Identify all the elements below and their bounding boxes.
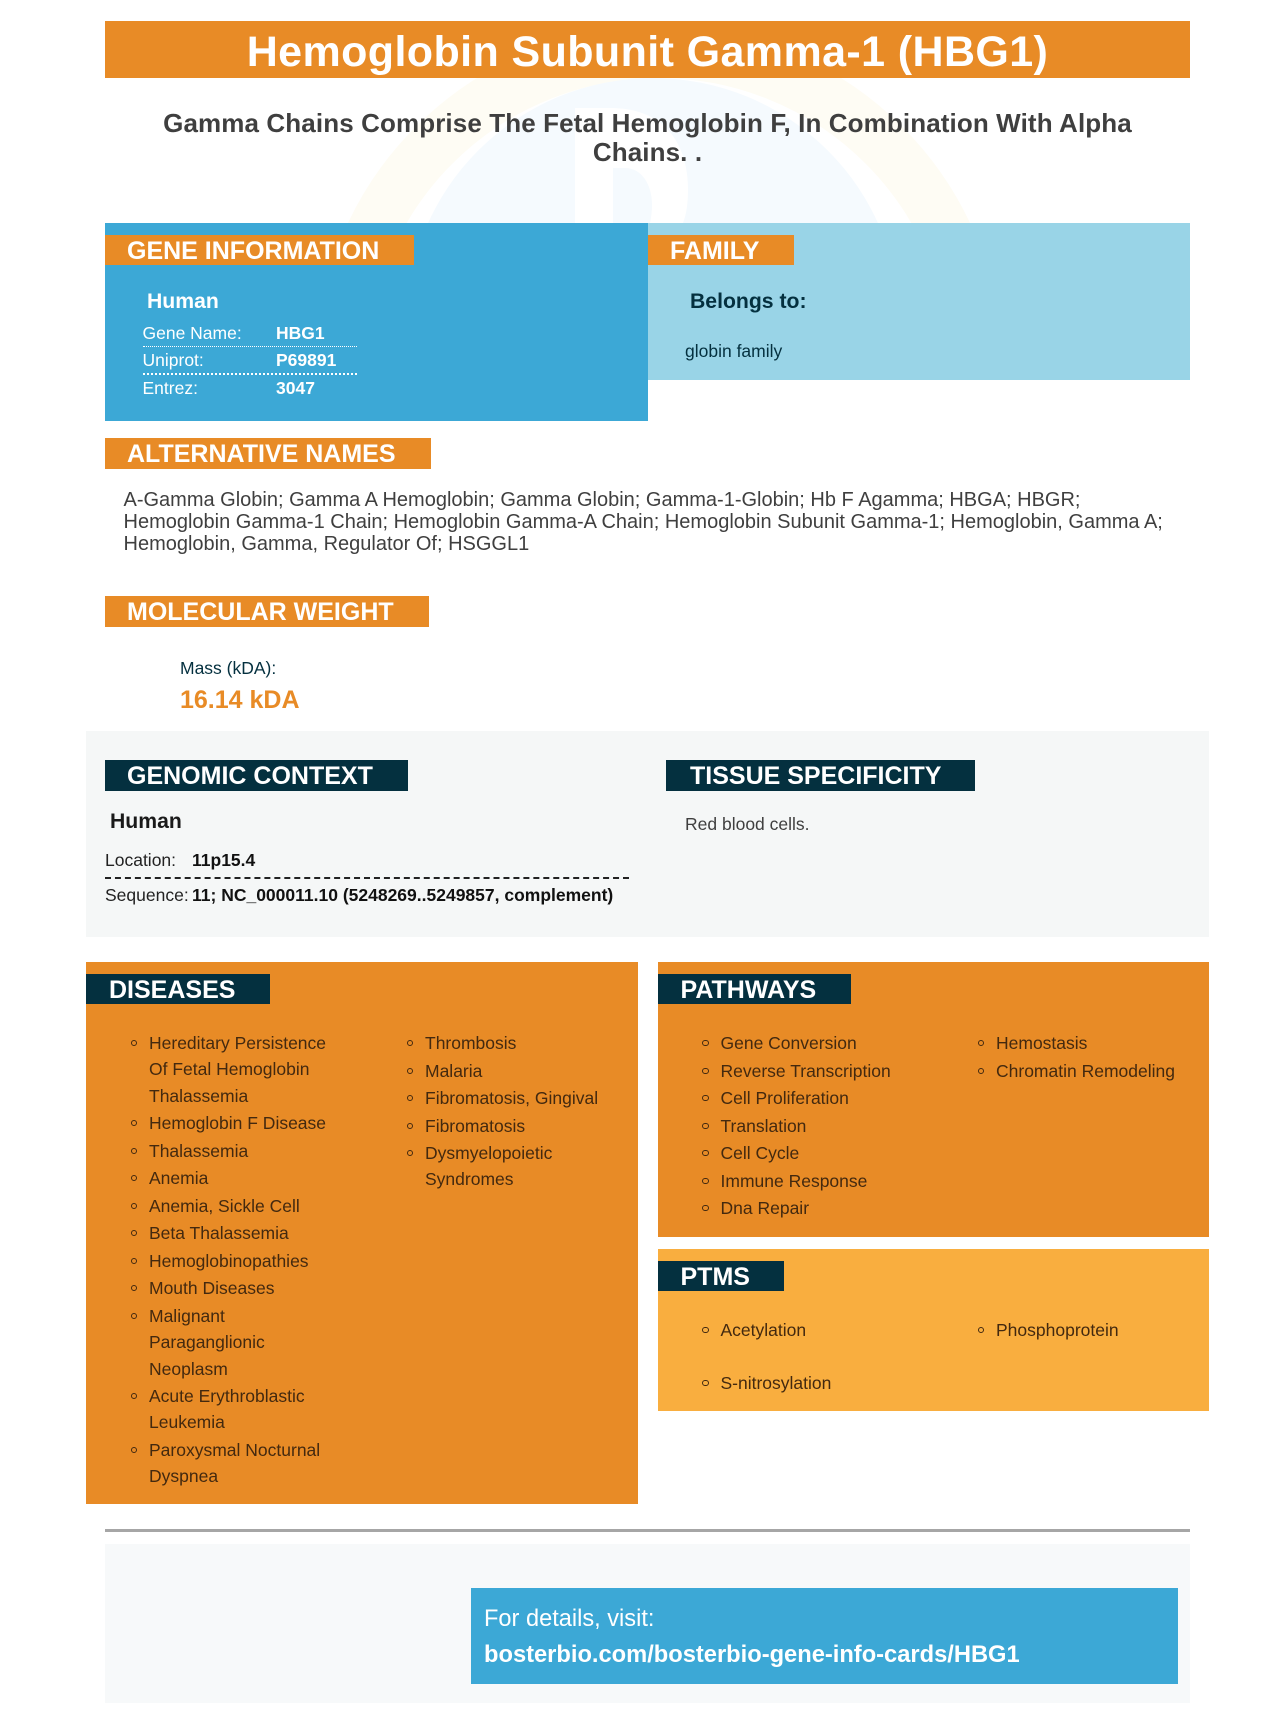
disease list: Leukemia: [149, 1412, 225, 1432]
disease list: Thalassemia: [149, 1141, 248, 1161]
disease list: Mouth Diseases: [149, 1278, 274, 1298]
mass label: Mass (kDA):: [180, 658, 276, 678]
sequence row: Sequence:: [105, 885, 189, 905]
pathway list: Cell Proliferation: [720, 1088, 849, 1108]
disease list: Beta Thalassemia: [149, 1223, 289, 1243]
panel: family: [648, 223, 1190, 380]
gene identifiers table: Entrez:: [142, 378, 198, 398]
heading: alternative names: ALTERNATIVE NAMES: [127, 440, 396, 468]
heading: genomic context: GENOMIC CONTEXT: [127, 762, 373, 790]
pathway list: Immune Response: [720, 1171, 867, 1191]
belongs to label: Belongs to:: [690, 290, 807, 313]
disease list: Dysmyelopoietic: [425, 1143, 552, 1163]
subtitle: [163, 108, 1132, 167]
disease list: Of Fetal Hemoglobin: [149, 1059, 310, 1079]
pathway list: [702, 1033, 1175, 1218]
species label: Human: [147, 290, 219, 313]
ptm list: Acetylation: [720, 1320, 806, 1340]
heading: molecular weight: MOLECULAR WEIGHT: [127, 598, 394, 626]
heading: ptms: PTMS: [680, 1263, 750, 1291]
callout: details link: bosterbio.com/bosterbio-gene-info-cards/HBG1: [484, 1642, 1020, 1668]
disease list: Anemia: [149, 1168, 208, 1188]
disease list: Malaria: [425, 1061, 482, 1081]
location row: [105, 850, 256, 870]
background watermark logo: [348, 78, 970, 223]
pathway list: Cell Cycle: [720, 1143, 799, 1163]
disease list: [131, 1033, 598, 1486]
disease list: Hemoglobinopathies: [149, 1251, 309, 1271]
heading: pathways: PATHWAYS: [680, 976, 816, 1004]
panel: genomic context and tissue specificity: 11; NC_000011.10 (5248269..5249857, complement): [192, 885, 613, 905]
alternative names text: Hemoglobin Gamma-1 Chain; Hemoglobin Gamma-A Chain; Hemoglobin Subunit Gamma-1; Hemoglobin, Gamma A;: [124, 511, 1163, 533]
alternative names text: A-Gamma Globin; Gamma A Hemoglobin; Gamma Globin; Gamma-1-Globin; Hb F Agamma; HBGA; HBGR;: [124, 489, 1080, 511]
disease list: Acute Erythroblastic: [149, 1386, 305, 1406]
disease list: Hemoglobin F Disease: [149, 1113, 326, 1133]
heading: diseases: [86, 974, 270, 1004]
disease list: Paraganglionic: [149, 1332, 265, 1352]
gene identifiers table: P69891: [276, 350, 336, 370]
disease list: Syndromes: [425, 1169, 514, 1189]
gene identifiers table: Gene Name:: [142, 322, 242, 342]
ptm list: [702, 1320, 1119, 1393]
pathway list: Reverse Transcription: [720, 1061, 891, 1081]
pathway list: Hemostasis: [996, 1033, 1087, 1053]
alternative names text: [124, 489, 1163, 555]
disease list: Hereditary Persistence: [149, 1033, 326, 1053]
disease list: Anemia, Sickle Cell: [149, 1196, 300, 1216]
subtitle: Gamma Chains Comprise The Fetal Hemoglobin F, In Combination With Alpha: [163, 108, 1132, 138]
mass value: 16.14 kDA: [180, 686, 300, 714]
pathway list: Gene Conversion: [720, 1033, 857, 1053]
panel: gene information: [105, 223, 648, 421]
panel: pathways: [658, 962, 1209, 1237]
callout: details link: For details, visit:: [484, 1606, 654, 1632]
heading: pathways: [658, 974, 851, 1004]
gene identifiers table: Uniprot:: [142, 350, 204, 370]
panel: footer: [105, 1544, 1190, 1703]
disease list: Malignant: [149, 1306, 225, 1326]
sequence row: [105, 885, 613, 905]
species label: Human: [110, 810, 182, 833]
heading: diseases: DISEASES: [109, 976, 235, 1004]
panel: ptms: [658, 1249, 1209, 1411]
family value: globin family: [685, 341, 782, 361]
location row: Location:: [105, 850, 176, 870]
tissue specificity text: Red blood cells.: [685, 814, 810, 834]
disease list: Thalassemia: [149, 1086, 248, 1106]
disease list: Paroxysmal Nocturnal: [149, 1440, 320, 1460]
disease list: Fibromatosis: [425, 1116, 525, 1136]
ptm list: Phosphoprotein: [996, 1320, 1119, 1340]
title banner: Hemoglobin Subunit Gamma-1 (HBG1): [247, 28, 1048, 76]
alternative names text: Hemoglobin, Gamma, Regulator Of; HSGGL1: [124, 533, 529, 555]
gene identifiers table: [142, 322, 357, 398]
disease list: Neoplasm: [149, 1359, 228, 1379]
panel: genomic context and tissue specificity: [86, 731, 1209, 937]
pathway list: Translation: [720, 1116, 806, 1136]
ptm list: S-nitrosylation: [720, 1373, 831, 1393]
disease list: Thrombosis: [425, 1033, 516, 1053]
heading: tissue specificity: TISSUE SPECIFICITY: [690, 762, 941, 790]
dashed divider: [105, 877, 629, 879]
heading: gene information: GENE INFORMATION: [127, 237, 379, 265]
heading: family: FAMILY: [670, 237, 759, 265]
gene identifiers table: 3047: [276, 378, 315, 398]
heading: ptms: [658, 1261, 784, 1291]
pathway list: Dna Repair: [720, 1198, 809, 1218]
subtitle: Chains. .: [593, 137, 702, 167]
heading: family: [648, 235, 794, 265]
callout: details link: [471, 1588, 1178, 1684]
panel: genomic context and tissue specificity: 11p15.4: [192, 850, 255, 870]
gene identifiers table: HBG1: [276, 322, 325, 342]
pathway list: Chromatin Remodeling: [996, 1061, 1175, 1081]
disease list: Fibromatosis, Gingival: [425, 1088, 598, 1108]
disease list: Dyspnea: [149, 1466, 218, 1486]
panel: diseases: [86, 962, 638, 1504]
title banner: [105, 21, 1190, 78]
